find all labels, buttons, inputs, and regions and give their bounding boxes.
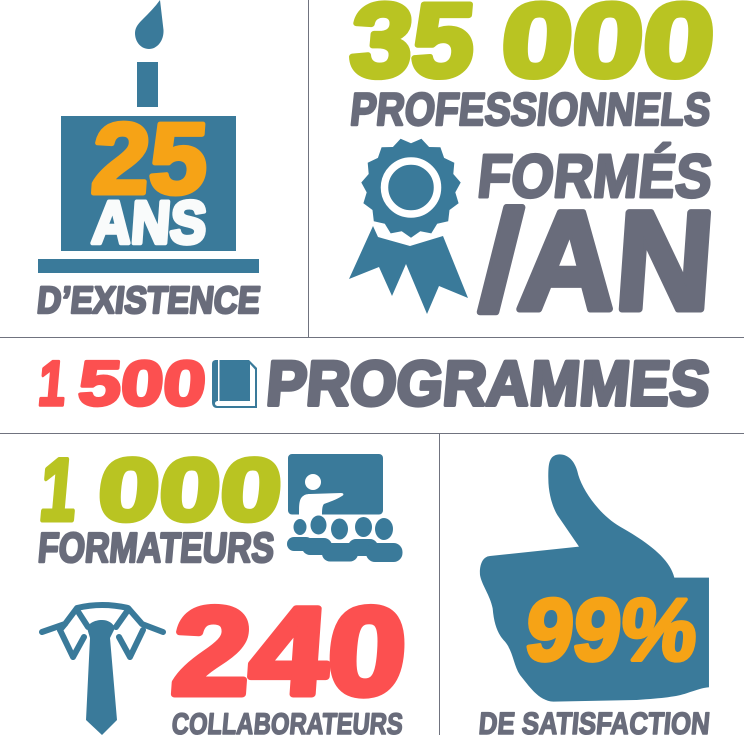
icon: cake base: [38, 259, 259, 273]
icon: candle flame: [135, 0, 164, 49]
label: formés: FORMÉS: [475, 142, 716, 210]
icon: tie and collar: [42, 605, 163, 735]
label: programmes: PROGRAMMES: [264, 349, 713, 419]
number: 99%: 99%: [521, 580, 702, 679]
panel: collaborateurs: [42, 583, 411, 735]
number: 1 500: 500: [76, 349, 209, 419]
icon: candle: [137, 62, 158, 107]
number: 1 000: 000: [94, 440, 286, 539]
panel: satisfaction: [477, 454, 711, 735]
icon: thumbs up: [480, 454, 709, 702]
panel: professionnels formés par an: [346, 0, 719, 339]
number: 1 500: [36, 349, 209, 419]
number: 1 000: 1: [36, 440, 81, 539]
panel: 25 ans d'existence: [35, 0, 262, 322]
number: 1 000: [36, 440, 286, 539]
panel: programmes: [36, 349, 713, 419]
number: 1 500: 1: [36, 349, 69, 419]
icon: trainer and audience: [287, 454, 402, 562]
label: ANS: ANS: [90, 189, 209, 256]
panel: formateurs: [36, 440, 402, 571]
icon: award ribbon: [349, 139, 468, 314]
label: /an: /AN: [477, 182, 719, 339]
icon: book: [212, 360, 257, 408]
label: formateurs: FORMATEURS: [36, 524, 276, 571]
icon: cake body: [61, 116, 236, 251]
number: 240: 240: [168, 583, 411, 721]
number: 25: 25: [88, 103, 211, 215]
number: 35 000: [346, 0, 719, 99]
label: d'existence: D’EXISTENCE: [35, 280, 262, 322]
